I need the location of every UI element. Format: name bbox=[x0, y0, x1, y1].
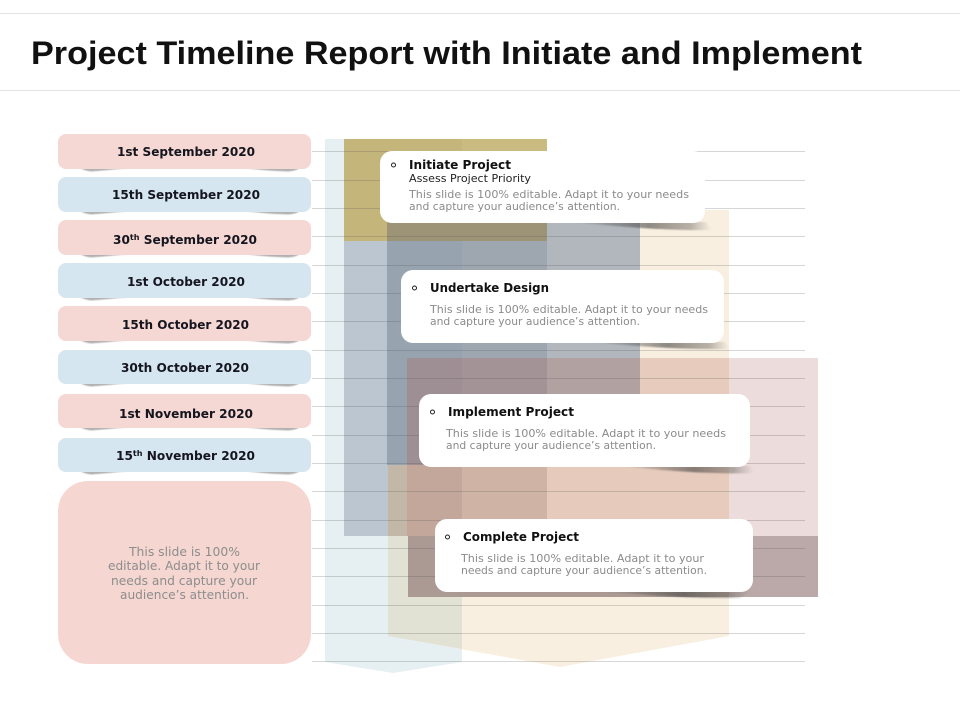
band overlap: blue and cream bbox=[388, 465, 462, 649]
card: Initiate Project: This slide is 100% editable. Adapt it to your needs bbox=[408, 188, 689, 201]
timeline chart: overlapping bands bbox=[325, 139, 818, 673]
card: Undertake Design: This slide is 100% editable. Adapt it to your needs bbox=[429, 303, 708, 316]
card: Undertake Design: Undertake Design bbox=[430, 281, 549, 295]
band: gold bbox=[344, 139, 547, 241]
date pill: 1st November 2020: 1st November 2020 bbox=[119, 407, 253, 421]
note panel: editable. Adapt it to your bbox=[108, 558, 261, 573]
card: Complete Project: This slide is 100% editable. Adapt it to your bbox=[460, 552, 704, 565]
note panel: audience’s attention. bbox=[120, 587, 249, 602]
band: dark taupe bbox=[408, 536, 818, 597]
date pill: 15th November 2020 bbox=[58, 438, 311, 474]
card: Complete Project: needs and capture your audience’s attention. bbox=[461, 564, 707, 577]
date pill: 1st September 2020: 1st September 2020 bbox=[117, 145, 255, 159]
note panel: needs and capture your bbox=[111, 573, 258, 588]
date pill: 30th September 2020 bbox=[58, 220, 311, 258]
date pill: 15th September 2020 bbox=[58, 177, 311, 214]
date pill: 1st September 2020 bbox=[58, 134, 311, 172]
horizontal grid lines bbox=[312, 152, 805, 662]
card: Initiate Project bbox=[380, 151, 712, 230]
card: Undertake Design bbox=[401, 270, 730, 349]
card: Complete Project: Complete Project bbox=[463, 530, 579, 544]
date pill: 30th September 2020: 30 bbox=[113, 233, 130, 247]
band: cream arrow bbox=[388, 210, 729, 667]
card: Implement Project: and capture your audience’s attention. bbox=[446, 439, 656, 452]
date pill: 15th October 2020: 15th October 2020 bbox=[122, 318, 249, 332]
date pill: 1st October 2020 bbox=[58, 263, 311, 300]
date pill: 30th October 2020 bbox=[58, 350, 311, 386]
card: Initiate Project: Assess Project Priority bbox=[409, 172, 531, 185]
date pill: 15th November 2020: 15 bbox=[116, 449, 133, 463]
card: Implement Project: This slide is 100% editable. Adapt it to your needs bbox=[445, 427, 726, 440]
card: Implement Project bbox=[419, 394, 754, 473]
band: light blue arrow bbox=[325, 139, 462, 673]
card: Initiate Project: and capture your audience’s attention. bbox=[409, 200, 620, 213]
card: Complete Project bbox=[435, 519, 753, 598]
date pill: 30th September 2020: th bbox=[130, 233, 140, 242]
date pill: 15th November 2020: th bbox=[133, 449, 143, 458]
note panel: This slide is 100% bbox=[128, 544, 240, 559]
date pill: 15th November 2020: November 2020 bbox=[143, 449, 255, 463]
date pill: 1st October 2020: 1st October 2020 bbox=[127, 275, 245, 289]
date pill: 30th September 2020: September 2020 bbox=[140, 233, 257, 247]
header rule bottom bbox=[0, 90, 960, 91]
date pill: 1st November 2020 bbox=[58, 394, 311, 430]
title: Project Timeline Report with Initiate and Implement bbox=[31, 35, 862, 71]
note panel bbox=[58, 481, 311, 664]
band: rose bbox=[388, 358, 818, 536]
card: Undertake Design: and capture your audience’s attention. bbox=[430, 315, 640, 328]
date pill: 15th September 2020: 15th September 2020 bbox=[112, 188, 260, 202]
card: Implement Project: Implement Project bbox=[448, 405, 574, 419]
date pill: 30th October 2020: 30th October 2020 bbox=[121, 361, 249, 375]
card: Initiate Project: Initiate Project bbox=[409, 158, 511, 172]
header rule top bbox=[0, 13, 960, 14]
date pill: 15th October 2020 bbox=[58, 306, 311, 344]
band: steel blue bbox=[344, 210, 640, 536]
